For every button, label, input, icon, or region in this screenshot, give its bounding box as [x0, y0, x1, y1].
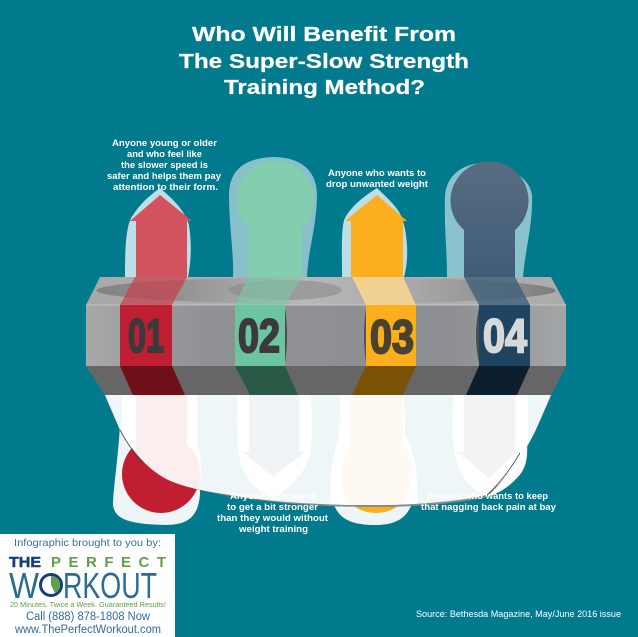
text block: benefit 2: than they would without — [217, 513, 328, 523]
logo: W: W — [9, 565, 39, 606]
icon: lower halo and orange circle — [331, 435, 415, 525]
icon: lower halo and red circle — [113, 425, 200, 525]
title: Training Method? — [224, 76, 425, 99]
icon: upper halo and circle 04 — [445, 161, 532, 277]
reflection ghost 4 — [452, 395, 528, 497]
text block: benefit 1: and who feel like — [127, 149, 202, 159]
text block: benefit 1: safer and helps them pay — [107, 171, 221, 181]
logo panel — [0, 534, 175, 637]
logo website: www.ThePerfectWorkout.com — [14, 624, 161, 636]
reflection ghost 2 — [237, 395, 312, 497]
text block: benefit 1: the slower speed is — [121, 160, 208, 170]
text block: benefit 2 — [217, 491, 328, 534]
logo phone: Call (888) 878-1808 Now — [26, 611, 151, 623]
reflection ghost 1 — [122, 395, 201, 490]
text block: benefit 2: to get a bit stronger — [227, 502, 319, 512]
ridge ellipses — [96, 277, 556, 304]
reflection ghost 3 — [330, 395, 418, 510]
number 02: 02 — [238, 309, 280, 362]
text block: benefit 4: Anyone who wants to keep — [427, 491, 549, 501]
logo: PERFECT: PERFECT — [51, 554, 166, 571]
title — [179, 23, 469, 99]
source note: Source: Bethesda Magazine, May/June 2016 issue — [416, 609, 621, 619]
logo tagline: 20 Minutes. Twice a Week. Guaranteed Results! — [10, 600, 166, 609]
icon: upper halo and arrow 01 — [125, 188, 192, 277]
icon: lower halo 04 — [488, 440, 527, 496]
text block: benefit 3: drop unwanted weight — [326, 179, 428, 189]
lower face — [86, 366, 566, 395]
stripe 03 — [352, 277, 416, 395]
text block: benefit 3 — [326, 168, 428, 189]
logo: RKOUT: RKOUT — [63, 565, 157, 606]
front face — [86, 305, 566, 366]
stripe 04 — [464, 277, 530, 395]
3D band — [86, 277, 566, 395]
text block: benefit 3: Anyone who wants to — [328, 168, 427, 178]
text block: benefit 2: Anyone who wants — [230, 491, 317, 501]
top ridge — [86, 277, 566, 305]
text block: benefit 2: weight training — [238, 524, 308, 534]
text block: benefit 1 — [107, 138, 221, 192]
logo: THE: THE — [9, 554, 41, 571]
number 01: 01 — [128, 309, 164, 362]
icon: upper halo and circle 02 — [229, 157, 317, 277]
number 03: 03 — [370, 310, 414, 363]
text block: benefit 1: Anyone young or older — [112, 138, 218, 148]
bowl edge lines — [120, 430, 520, 495]
text block: benefit 1: attention to their form. — [113, 182, 218, 192]
stripe 02 — [235, 277, 302, 395]
logo caption: Infographic brought to you by: — [14, 537, 161, 549]
title: The Super-Slow Strength — [179, 50, 469, 73]
title: Who Will Benefit From — [192, 23, 456, 46]
stripe 01 — [120, 277, 187, 395]
number 04: 04 — [483, 309, 527, 362]
text block: benefit 4 — [421, 491, 556, 512]
icon: upper halo and arrow 03 — [342, 188, 407, 277]
white bowl reflection — [105, 395, 551, 510]
text block: benefit 4: that nagging back pain at bay — [421, 502, 556, 512]
icon: clock O — [40, 574, 62, 596]
